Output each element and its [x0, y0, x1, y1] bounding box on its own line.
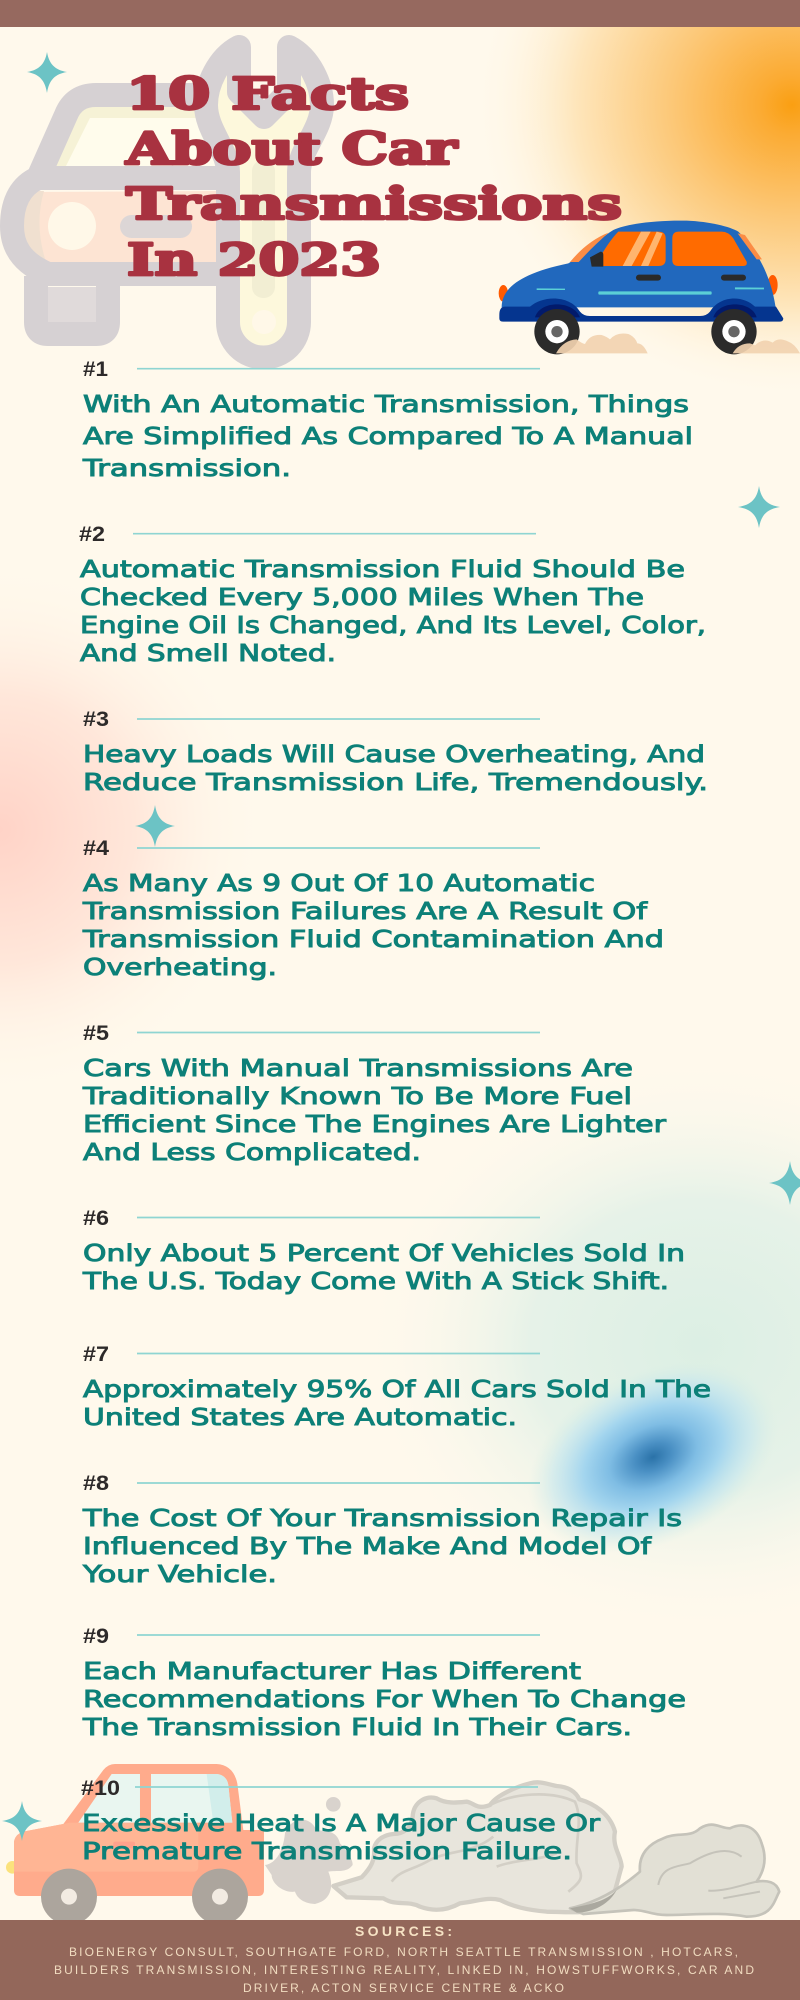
fact 10: Excessive Heat Is A Major Cause Or: [82, 1811, 601, 1837]
icon: faded car and wrench: [12, 47, 322, 358]
title: [125, 69, 622, 286]
fact 6: [82, 1207, 685, 1295]
fact 8: Your Vehicle.: [82, 1562, 277, 1588]
fact 5: #5: [83, 1022, 109, 1045]
fact 2: Automatic Transmission Fluid Should Be: [80, 557, 685, 583]
title: 10 Facts: [126, 69, 409, 120]
fact 3: [83, 708, 708, 796]
fact 8: Influenced By The Make And Model Of: [83, 1534, 652, 1560]
header bar: [0, 0, 800, 27]
fact 1: #1: [83, 358, 108, 381]
fact 7: Approximately 95% Of All Cars Sold In The: [83, 1377, 711, 1403]
icon: sparkle top left: [27, 52, 67, 93]
fact 8: [82, 1472, 682, 1588]
panel: sources: [0, 1920, 800, 2000]
fact 4: As Many As 9 Out Of 10 Automatic: [83, 871, 595, 897]
title: About Car: [125, 124, 458, 175]
fact 9: [82, 1625, 686, 1741]
title: In 2023: [127, 235, 381, 286]
title: Transmissions: [126, 179, 622, 230]
fact 2: And Smell Noted.: [80, 641, 336, 667]
fact 6: The U.S. Today Come With A Stick Shift.: [82, 1269, 669, 1295]
fact 5: [82, 1022, 667, 1166]
icon: sparkle right of fact 1: [738, 486, 780, 528]
fact 2: [79, 523, 706, 667]
fact 7: [83, 1343, 711, 1431]
icon: large smoke clouds: [333, 1782, 779, 1917]
fact 5: Efficient Since The Engines Are Lighter: [83, 1112, 667, 1138]
fact 4: Overheating.: [83, 955, 277, 981]
icon: sparkle bottom left: [2, 1801, 42, 1841]
icon: sparkle below fact 3: [135, 805, 175, 847]
sources list: [54, 1945, 754, 1995]
sources list: BUILDERS TRANSMISSION, INTERESTING REALITY, LINKED IN, HOWSTUFFWORKS, CAR AND: [54, 1963, 754, 1977]
icon: sparkle right of fact 5: [769, 1161, 800, 1205]
fact 4: [82, 837, 664, 981]
fact 3: #3: [83, 708, 109, 731]
sources list: BIOENERGY CONSULT, SOUTHGATE FORD, NORTH SEATTLE TRANSMISSION , HOTCARS,: [69, 1945, 738, 1959]
fact 1: [82, 358, 693, 482]
fact 4: Transmission Fluid Contamination And: [82, 927, 664, 953]
fact 4: Transmission Failures Are A Result Of: [82, 899, 648, 925]
fact 10: #10: [81, 1777, 120, 1800]
icon: blue car: [499, 221, 800, 354]
sources heading: SOURCES:: [355, 1923, 452, 1939]
fact 5: And Less Complicated.: [83, 1140, 421, 1166]
fact 4: #4: [83, 837, 109, 860]
fact 1: Transmission.: [82, 456, 291, 482]
fact 2: Engine Oil Is Changed, And Its Level, Color,: [80, 613, 706, 639]
fact 6: #6: [83, 1207, 109, 1230]
fact 3: Heavy Loads Will Cause Overheating, And: [83, 742, 705, 768]
fact 1: With An Automatic Transmission, Things: [83, 392, 689, 418]
fact 7: United States Are Automatic.: [83, 1405, 517, 1431]
fact 9: The Transmission Fluid In Their Cars.: [82, 1715, 632, 1741]
fact 9: Recommendations For When To Change: [83, 1687, 686, 1713]
icon: salmon car: [6, 1764, 264, 1925]
fact 8: The Cost Of Your Transmission Repair Is: [82, 1506, 682, 1532]
fact 1: Are Simplified As Compared To A Manual: [83, 424, 693, 450]
fact 7: #7: [83, 1343, 109, 1366]
fact 10: Premature Transmission Failure.: [82, 1839, 572, 1865]
fact 2: Checked Every 5,000 Miles When The: [80, 585, 644, 611]
fact 6: Only About 5 Percent Of Vehicles Sold In: [83, 1241, 685, 1267]
fact 3: Reduce Transmission Life, Tremendously.: [83, 770, 708, 796]
fact 8: #8: [83, 1472, 109, 1495]
icon: small exhaust puff: [265, 1797, 353, 1904]
sources list: DRIVER, ACTON SERVICE CENTRE & ACKO: [243, 1981, 564, 1995]
fact 10: [81, 1777, 601, 1865]
fact 2: #2: [79, 523, 105, 546]
fact 9: Each Manufacturer Has Different: [83, 1659, 581, 1685]
fact 5: Traditionally Known To Be More Fuel: [82, 1084, 632, 1110]
fact 5: Cars With Manual Transmissions Are: [83, 1056, 633, 1082]
fact 9: #9: [83, 1625, 109, 1648]
